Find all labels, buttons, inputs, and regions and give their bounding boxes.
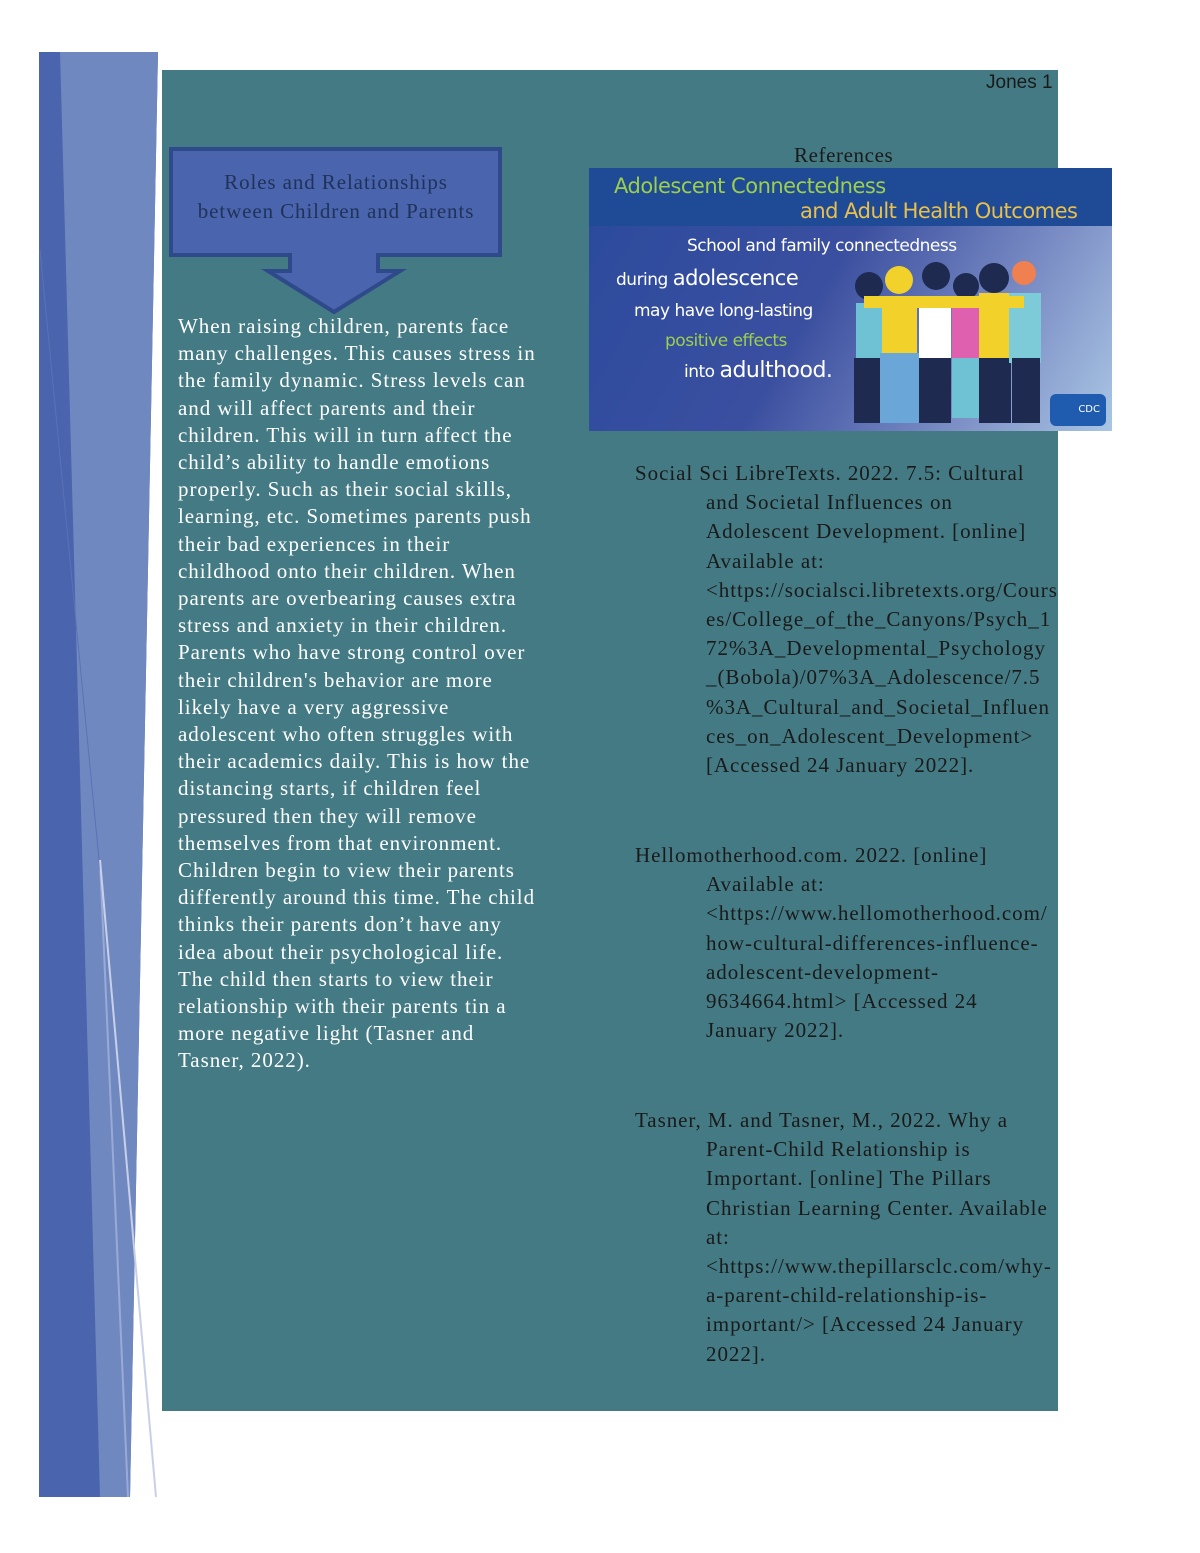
reference 2: Hellomotherhood.com. 2022. [online] [635,843,987,867]
reference 2: <https://www.hellomotherhood.com/ [706,901,1048,925]
heading: references: References [794,143,893,167]
text block: main body: many challenges. This causes stress in [178,341,536,365]
reference 3: Important. [online] The Pillars [706,1166,992,1190]
reference 1: Available at: [706,549,825,573]
text block: main body: stress and anxiety in their children. [178,613,507,637]
image: CDC adolescent connectedness: School and family connectedness [687,236,957,256]
text block: main body: relationship with their parents tin a [178,994,506,1018]
text block: main body: Parents who have strong control over [178,640,525,664]
heading: between Children and Parents [198,199,474,223]
reference 3: Christian Learning Center. Available [706,1196,1048,1220]
reference 2: Available at: [706,872,825,896]
text block: main body: Tasner, 2022). [178,1048,311,1072]
text block: main body: distancing starts, if children feel [178,776,481,800]
reference 1: ces_on_Adolescent_Development> [706,724,1033,748]
text block: main body: learning, etc. Sometimes parents push [178,504,532,528]
image: CDC adolescent connectedness: during adolescence [616,266,798,290]
reference 3: Parent-Child Relationship is [706,1137,971,1161]
text block: main body: childhood onto their children. When [178,559,516,583]
callout: title box with arrow [169,147,502,314]
image: CDC adolescent connectedness: Adolescent Connectedness [614,174,886,198]
text block: main body: parents are overbearing causes extra [178,586,517,610]
image: CDC adolescent connectedness: into adulthood. [684,358,832,383]
reference 1: [Accessed 24 January 2022]. [706,753,974,777]
reference 1: and Societal Influences on [706,490,953,514]
reference 3: at: [706,1225,730,1249]
text block: main body: child’s ability to handle emotions [178,450,490,474]
reference 1: <https://socialsci.libretexts.org/Cours [706,578,1058,602]
heading [198,170,474,223]
reference 1: Social Sci LibreTexts. 2022. 7.5: Cultural [635,461,1025,485]
image: CDC adolescent connectedness: positive effects [665,331,787,351]
text block: main body: idea about their psychological life. [178,940,503,964]
reference 1: Adolescent Development. [online] [706,519,1026,543]
text block: main body [178,314,536,1072]
reference 2: how-cultural-differences-influence- [706,931,1039,955]
reference 1: es/College_of_the_Canyons/Psych_1 [706,607,1051,631]
decorative side stripes [39,52,158,1498]
text block: main body: their children's behavior are more [178,668,493,692]
reference 2: adolescent-development- [706,960,939,984]
text block: main body: children. This will in turn affect the [178,423,512,447]
image: CDC adolescent connectedness: and Adult Health Outcomes [800,199,1077,223]
reference 1: %3A_Cultural_and_Societal_Influen [706,695,1050,719]
heading: Roles and Relationships [224,170,448,194]
reference 1 [635,461,1058,777]
reference 3: important/> [Accessed 24 January [706,1312,1024,1336]
teal panel [162,70,1058,1411]
text block: main body: differently around this time. The child [178,885,535,909]
reference 3: <https://www.thepillarsclc.com/why- [706,1254,1052,1278]
reference 3: a-parent-child-relationship-is- [706,1283,987,1307]
reference 3 [635,1108,1052,1366]
text block: main body: their academics daily. This is how the [178,749,530,773]
page number: Jones 1 [986,72,1053,93]
text block: main body: their bad experiences in their [178,532,450,556]
text block: main body: thinks their parents don’t have any [178,912,502,936]
text block: main body: properly. Such as their social skills, [178,477,512,501]
reference 3: Tasner, M. and Tasner, M., 2022. Why a [635,1108,1008,1132]
text block: main body: The child then starts to view their [178,967,494,991]
text block: main body: pressured then they will remove [178,804,477,828]
image: CDC adolescent connectedness: may have long-lasting [634,301,813,321]
text block: main body: Children begin to view their parents [178,858,515,882]
image: CDC adolescent connectedness: CDC [1078,404,1100,415]
text block: main body: When raising children, parents face [178,314,509,338]
image: CDC adolescent connectedness [589,168,1112,431]
text block: main body: likely have a very aggressive [178,695,449,719]
text block: main body: and will affect parents and their [178,396,475,420]
reference 1: _(Bobola)/07%3A_Adolescence/7.5 [706,665,1040,689]
reference 1: 72%3A_Developmental_Psychology [706,636,1046,660]
text block: main body: themselves from that environment. [178,831,502,855]
text block: main body: more negative light (Tasner and [178,1021,474,1045]
text block: main body: the family dynamic. Stress levels can [178,368,526,392]
reference 2 [635,843,1048,1042]
reference 3: 2022]. [706,1342,766,1366]
text block: main body: adolescent who often struggles with [178,722,513,746]
reference 2: January 2022]. [706,1018,844,1042]
reference 2: 9634664.html> [Accessed 24 [706,989,978,1013]
